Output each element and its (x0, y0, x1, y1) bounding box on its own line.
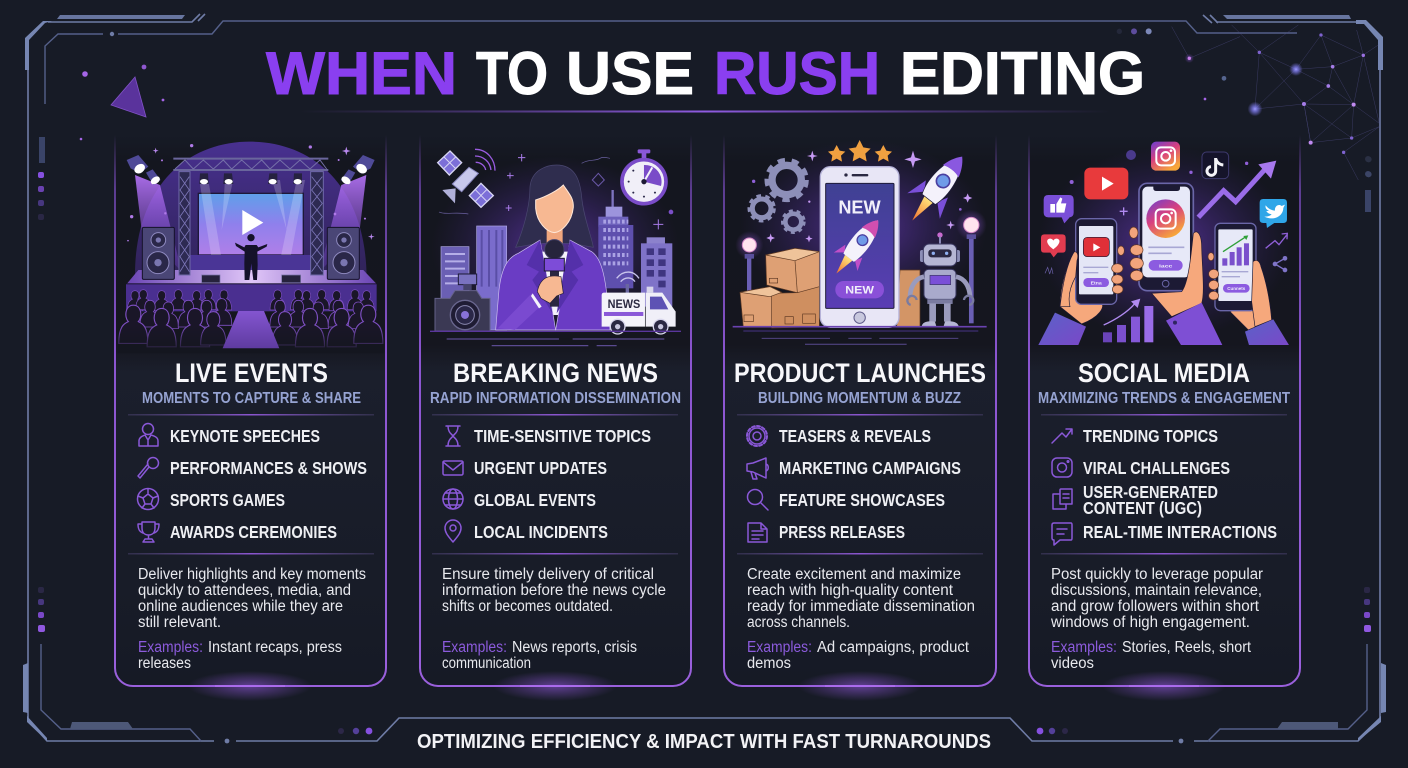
icon: microphone (138, 458, 158, 478)
camera (435, 274, 490, 331)
icon: ball (138, 488, 158, 510)
list: launch activities: MARKETING CAMPAIGNS (779, 458, 961, 478)
text block: description: Ad campaigns, product (817, 639, 970, 656)
icon: heart bubble (1041, 234, 1066, 257)
text block: description: News reports, crisis (512, 639, 637, 656)
gears (749, 160, 807, 233)
phone (820, 167, 899, 327)
text block: description: Ensure timely delivery of critical (442, 566, 654, 583)
list: news types: LOCAL INCIDENTS (474, 522, 608, 542)
subheading: BUILDING MOMENTUM & BUZZ (758, 390, 961, 407)
icon: youtube (1084, 168, 1128, 199)
van: NEWS (608, 298, 641, 311)
text block: description (747, 566, 975, 672)
text block: description: Create excitement and maximize (747, 566, 961, 583)
phone center with hand: Iacc (1159, 263, 1173, 269)
text block: description: quickly to attendees, media, and (138, 582, 351, 599)
list: live event types: KEYNOTE SPEECHES (170, 426, 320, 446)
text block: description: communication (442, 655, 531, 672)
icon: instagram (1151, 142, 1180, 171)
text block: description: across channels. (747, 614, 850, 631)
decoration: constellation network (1117, 25, 1379, 180)
icon: globe (443, 489, 463, 509)
illustration: product launch phone (733, 140, 987, 344)
text block: description: and grow followers within short (1051, 598, 1260, 615)
van (602, 272, 676, 334)
heading: live events: LIVE EVENTS (175, 358, 328, 388)
text block: description: reach with high-quality content (747, 582, 954, 599)
list: social activities: USER-GENERATED (1083, 482, 1218, 502)
icon: document (748, 523, 767, 542)
boxes (740, 248, 920, 328)
text block: description: windows of high engagement. (1050, 614, 1250, 631)
text block: description (442, 566, 666, 672)
illustration: phones and social icons (1038, 142, 1292, 345)
text block: description: Examples: (747, 639, 812, 656)
satellite (438, 149, 495, 207)
rocket small (825, 211, 890, 283)
text block: description: discussions, maintain relevance, (1051, 582, 1262, 599)
text block: description: Stories, Reels, short (1122, 639, 1252, 656)
panel: breaking news (420, 135, 691, 701)
subheading: RAPID INFORMATION DISSEMINATION (430, 390, 681, 407)
icon: tiktok (1202, 152, 1229, 179)
subheading: MAXIMIZING TRENDS & ENGAGEMENT (1038, 390, 1290, 407)
decoration: triangle and dots (80, 65, 164, 140)
icon: twitter bubble (1260, 199, 1287, 228)
robot (907, 232, 973, 327)
icon: speech bubble (1052, 523, 1072, 545)
phone right with hand (1208, 223, 1289, 345)
text block: description: Instant recaps, press (208, 639, 342, 656)
title (266, 40, 1145, 107)
panel: social media (1029, 135, 1300, 701)
text block: description: Deliver highlights and key moments (138, 566, 366, 583)
text block: description: still relevant. (138, 614, 221, 631)
phone: NEW (838, 196, 881, 217)
bar chart (1103, 299, 1153, 342)
list: news types: GLOBAL EVENTS (474, 490, 596, 510)
icon: trophy (138, 522, 159, 542)
panel: product launches (724, 135, 996, 701)
phone: NEW (845, 285, 874, 297)
phone left with hand (1038, 219, 1124, 345)
buildings (441, 190, 672, 330)
title: WHEN (266, 40, 457, 107)
title: TO (476, 40, 548, 107)
icon: camera square (1052, 458, 1072, 477)
text block: description: Examples: (138, 639, 203, 656)
icon: hourglass (446, 426, 460, 446)
icon: trend line (1052, 429, 1072, 443)
text block: description: online audiences while they are (138, 598, 343, 615)
list: launch activities: PRESS RELEASES (779, 522, 905, 542)
heading: breaking news: BREAKING NEWS (453, 358, 658, 388)
list: news types (443, 426, 651, 542)
heading: social media: SOCIAL MEDIA (1078, 358, 1250, 388)
list: social activities: TRENDING TOPICS (1083, 426, 1218, 446)
text block: description: ready for immediate dissemination (747, 598, 975, 615)
title: EDITING (900, 40, 1145, 107)
arrow: growth (1198, 161, 1287, 272)
figure: speaker on stage (235, 234, 267, 280)
text block: description (138, 566, 366, 672)
icon: megaphone (747, 458, 768, 479)
text block: description: Examples: (1051, 639, 1117, 656)
list: social activities: REAL-TIME INTERACTIONS (1083, 522, 1277, 542)
footer tagline: OPTIMIZING EFFICIENCY & IMPACT WITH FAST TURNAROUNDS (417, 730, 991, 753)
illustration: concert stage (117, 142, 384, 353)
list: live event types: SPORTS GAMES (170, 490, 285, 510)
list: launch activities: FEATURE SHOWCASES (779, 490, 945, 510)
text block: description: demos (747, 655, 791, 672)
icon: magnifier (748, 490, 768, 510)
list: social activities: CONTENT (UGC) (1083, 498, 1202, 518)
phone center with hand (1129, 183, 1222, 345)
audience (119, 290, 383, 347)
list: social activities: VIRAL CHALLENGES (1083, 458, 1230, 478)
phone right with hand: Cunnets (1227, 286, 1246, 291)
title underline (300, 110, 1110, 112)
text block: description: shifts or becomes outdated. (442, 598, 613, 615)
list: live event types: AWARDS CEREMONIES (170, 522, 337, 542)
text block: description: information before the news cycle (442, 582, 666, 599)
list: launch activities: TEASERS & REVEALS (779, 426, 931, 446)
icon: gear (747, 426, 767, 446)
list: live event types (138, 424, 367, 542)
heading: product launches: PRODUCT LAUNCHES (734, 358, 986, 388)
illustration: news reporter (430, 149, 681, 346)
title: USE (566, 40, 694, 107)
lamps (735, 210, 987, 323)
stopwatch (622, 149, 666, 204)
list: live event types: PERFORMANCES & SHOWS (170, 458, 367, 478)
panel: live events (115, 135, 386, 701)
icon: envelope (443, 461, 463, 475)
icon: content cards (1053, 489, 1072, 509)
text block: description: videos (1051, 655, 1094, 672)
list: social activities (1052, 426, 1277, 545)
list: launch activities (747, 426, 961, 542)
icon: location pin (445, 520, 461, 542)
title: RUSH (714, 40, 880, 107)
icon: keynote speaker (139, 424, 158, 446)
rocket big (896, 144, 978, 233)
icon: like bubble (1044, 195, 1074, 223)
subheading: MOMENTS TO CAPTURE & SHARE (142, 390, 361, 407)
reporter (496, 165, 610, 330)
text block: description: Post quickly to leverage popular (1051, 566, 1263, 583)
text block: description: Examples: (442, 639, 507, 656)
phone left with hand: Etna (1091, 280, 1102, 285)
text block: description (1050, 566, 1263, 672)
list: news types: TIME-SENSITIVE TOPICS (474, 426, 651, 446)
list: news types: URGENT UPDATES (474, 458, 607, 478)
text block: description: releases (138, 655, 191, 672)
